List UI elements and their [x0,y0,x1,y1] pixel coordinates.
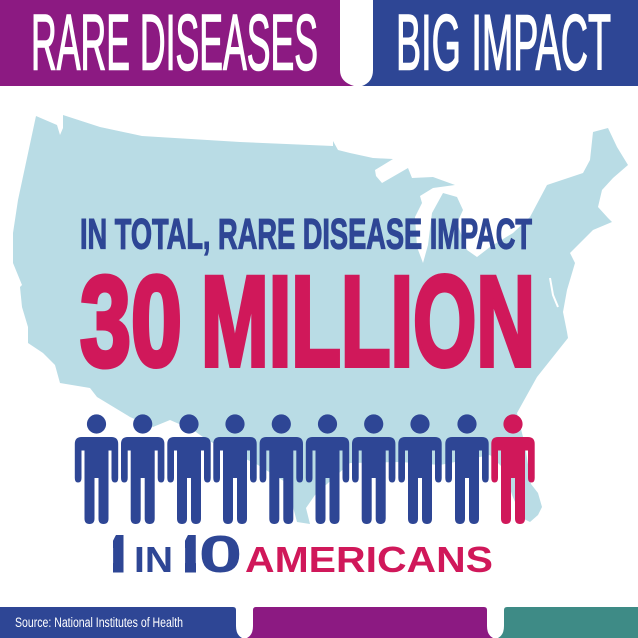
caption: 1 in 10 americans: AMERICANS [245,539,493,580]
person 1 [75,414,118,524]
people pictogram: 1 in 10 highlighted [75,414,535,524]
map: United States silhouette [13,115,628,524]
caption: 1 in 10 americans: 1 [106,525,128,584]
footer tab: purple [247,607,493,638]
caption: 1 in 10 americans: 0 [198,526,242,584]
person 2 [121,414,164,524]
person 7 [352,414,395,524]
person 10: highlighted [491,414,535,524]
header tab: rare diseases [0,0,354,86]
header tab: big impact [362,0,638,86]
person 5 [260,414,303,524]
caption: 1 in 10 americans: IN [134,539,173,580]
source text: Source: National Institutes of Health [15,615,183,630]
footer tab: source [0,607,242,638]
headline number: 30 million [80,250,535,394]
person 6 [306,414,349,524]
caption: 1 in 10 americans [113,535,492,572]
person 3 [167,414,211,524]
caption: 1 in 10 americans: 1 [178,525,200,584]
footer tab: teal [498,607,638,638]
person 8 [398,414,442,524]
person 9 [445,414,489,524]
headline number: 30 million: 30 [80,250,182,394]
person 4 [213,414,257,524]
